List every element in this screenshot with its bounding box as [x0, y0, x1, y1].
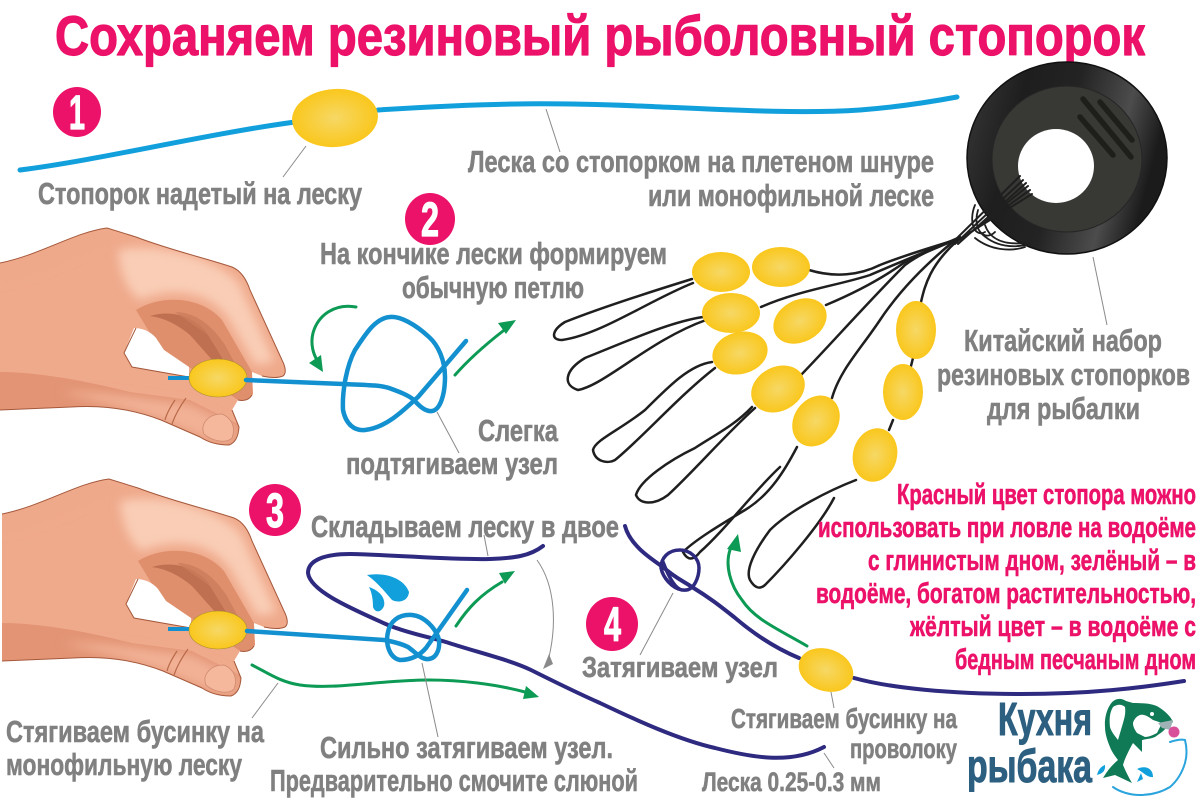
- logo: Кухня рыбака: рыбака: [967, 740, 1092, 792]
- caption: tighten knot strongly: Сильно затягиваем узел.: [320, 730, 613, 765]
- yellow stopper beads: [692, 247, 936, 487]
- caption: line with stopper: [468, 144, 934, 213]
- wire knot with bead, step 4: [625, 526, 1184, 699]
- step 1 number badge: [53, 87, 101, 140]
- arrow: pull knot: [456, 571, 515, 626]
- arrow: pull bead along line: [252, 665, 539, 699]
- logo: Кухня рыбака: Кухня: [998, 693, 1092, 745]
- arrow: pull up right: [455, 320, 516, 375]
- step 4 number badge: 4: [604, 599, 621, 652]
- caption: tighten knot strongly: [270, 730, 638, 798]
- caption: lightly tighten knot: Слегка: [478, 413, 559, 448]
- tightened knot, step 3: [247, 590, 467, 660]
- caption: tighten knot strongly: Предварительно смочите слюной: [270, 763, 638, 798]
- arrow: fold direction: [537, 560, 553, 669]
- callout: stopper colours: [816, 479, 1196, 676]
- illustration: hand holding bead, step 3: [2, 479, 287, 699]
- icon: water drops: [367, 574, 409, 611]
- caption: lightly tighten knot: подтягиваем узел: [346, 446, 558, 481]
- illustration: hand holding bead, step 2: [0, 228, 285, 448]
- caption: line diameter: Леска 0.25-0.3 мм: [702, 767, 881, 797]
- step 1 line with stopper bead: [20, 86, 957, 170]
- caption: pull bead on wire: проволоку: [850, 733, 957, 764]
- logo: Кухня рыбака: [967, 693, 1186, 795]
- step 1 number badge: 1: [69, 87, 85, 140]
- icon: leaping fish: [1097, 699, 1186, 795]
- icon: rubber stopper holder disk: [967, 62, 1167, 254]
- caption: pull bead on monofilament: Стягиваем бусинку на: [6, 714, 265, 749]
- caption: form a loop: [320, 236, 667, 305]
- caption: stopper on the line: Стопорок надетый на леску: [38, 176, 363, 211]
- step 3 number badge: 3: [266, 485, 284, 538]
- caption: Chinese stopper set: [937, 323, 1190, 426]
- caption: Chinese stopper set: для рыбалки: [987, 391, 1140, 426]
- caption: lightly tighten knot: [346, 413, 559, 481]
- stopper set: lines and loops: [554, 176, 1032, 588]
- caption: pull bead on wire: Стягиваем бусинку на: [731, 703, 957, 734]
- caption: line with stopper: Леска со стопорком на плетеном шнуре: [468, 144, 934, 179]
- step 4 number badge: [586, 597, 638, 652]
- caption: pull bead on monofilament: [6, 714, 265, 782]
- arrow: pull bead to knot: [727, 534, 807, 646]
- arrow: rotate loop: [309, 306, 356, 372]
- caption: line with stopper: или монофильной леске: [648, 178, 934, 213]
- caption: pull bead on wire: [731, 703, 957, 764]
- step 2 number badge: 2: [421, 194, 439, 247]
- step 3 number badge: [249, 484, 301, 538]
- caption: fold the line: Складываем леску в двое: [311, 509, 619, 544]
- caption: tighten knot, step 4: Затягиваем узел: [582, 652, 778, 684]
- caption: pull bead on monofilament: монофильную леску: [6, 747, 243, 782]
- knot loop, step 2: [246, 317, 466, 430]
- caption: form a loop: На кончике лески формируем: [320, 236, 667, 271]
- folded line: [308, 546, 824, 758]
- step 2 number badge: [405, 193, 455, 247]
- caption: form a loop: обычную петлю: [402, 270, 584, 305]
